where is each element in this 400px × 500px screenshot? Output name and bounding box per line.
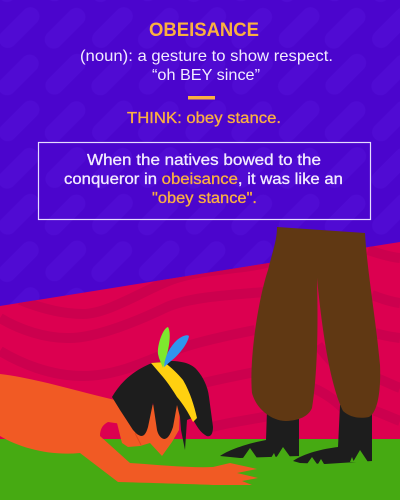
grass spikes <box>243 447 368 464</box>
bowing native figure <box>0 327 258 485</box>
divider <box>188 96 215 100</box>
title: OBEISANCE <box>149 20 259 41</box>
green ground <box>0 439 400 500</box>
red hill with wavy bands <box>0 242 400 440</box>
yellow headband <box>151 362 197 422</box>
hair <box>112 361 213 450</box>
callout box <box>38 142 370 220</box>
pronunciation: “oh BEY since” <box>152 67 260 84</box>
brown pants <box>251 227 380 421</box>
orange body and arm <box>0 374 258 485</box>
green feather <box>158 327 170 368</box>
right boot <box>293 405 372 464</box>
callout text line 3: "obey stance". <box>152 190 257 207</box>
conqueror: legs and boots <box>220 227 380 464</box>
left boot <box>220 410 299 458</box>
callout text line 2: conqueror in obeisance, it was like an <box>64 171 343 188</box>
think line: THINK: obey stance. <box>127 110 281 127</box>
blue feather <box>164 335 189 367</box>
definition: (noun): a gesture to show respect. <box>80 48 333 65</box>
jaw line <box>135 433 141 445</box>
head and face <box>117 405 180 456</box>
callout text line 1: When the natives bowed to the <box>87 152 321 169</box>
